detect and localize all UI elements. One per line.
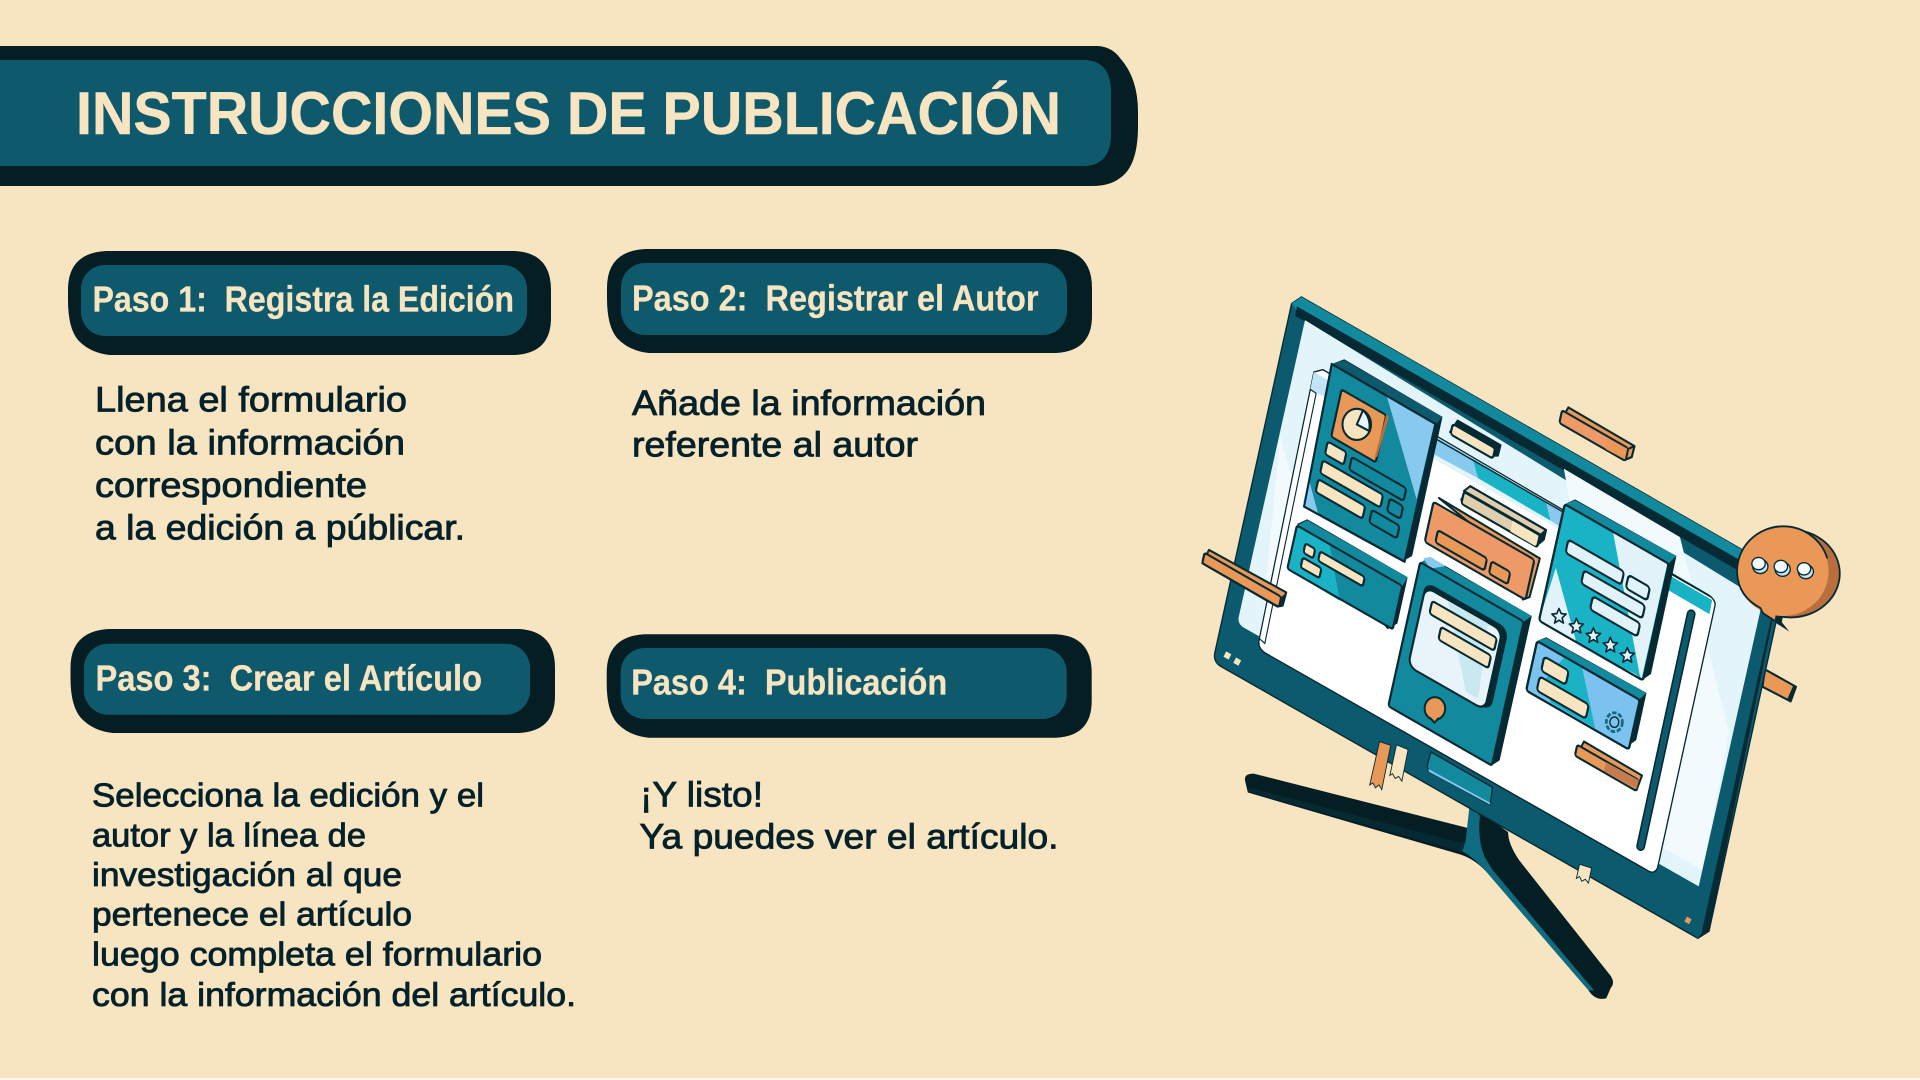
step 1 text: con la información xyxy=(95,423,405,462)
floating bar top xyxy=(1559,407,1634,461)
monitor frame xyxy=(1214,297,1786,938)
step 3 text: pertenece el artículo xyxy=(92,896,412,933)
step 3 text: Selecciona la edición y el xyxy=(92,777,484,814)
step 1 text xyxy=(95,381,465,548)
step 3 heading: Paso 3: Crear el Artículo xyxy=(96,658,482,699)
step 3 text: con la información del artículo. xyxy=(92,976,576,1013)
step 1 heading: Paso 1: Registra la Edición xyxy=(92,278,514,320)
illustration: monitor with interface cards xyxy=(1202,297,1840,999)
monitor screen xyxy=(1238,320,1763,886)
step 1 heading xyxy=(68,251,551,355)
step 4 heading xyxy=(607,634,1092,738)
step 1 text: a la edición a públicar. xyxy=(95,508,465,548)
cream input bar xyxy=(1461,486,1546,547)
step 2 text: Añade la información xyxy=(632,384,986,423)
step 2 text: referente al autor xyxy=(632,426,918,465)
floating bar behind monitor xyxy=(1763,669,1796,701)
floating bar left xyxy=(1202,550,1286,607)
small cream label xyxy=(1450,421,1501,459)
step 4 text: Ya puedes ver el artículo. xyxy=(640,817,1058,856)
card: text lines xyxy=(1287,519,1408,629)
step 1 text: correspondiente xyxy=(95,466,367,505)
title banner xyxy=(0,46,1138,186)
card: chart profile xyxy=(1303,359,1442,562)
rating stars xyxy=(1552,608,1634,662)
speech bubble xyxy=(1737,526,1840,632)
step 3 text: investigación al que xyxy=(92,856,402,893)
card: settings xyxy=(1526,637,1646,749)
step 3 heading xyxy=(70,629,555,733)
step 4 heading: Paso 4: Publicación xyxy=(631,662,947,703)
stand connector xyxy=(1427,752,1492,805)
step 2 text xyxy=(632,384,986,465)
card: tablet form xyxy=(1388,557,1532,766)
step 2 heading: Paso 2: Registrar el Autor xyxy=(632,278,1038,318)
step 3 text xyxy=(92,777,576,1013)
orange card xyxy=(1425,498,1540,600)
step 3 text: autor y la línea de xyxy=(92,817,366,854)
monitor stand xyxy=(1245,774,1613,999)
bubble dots xyxy=(1752,557,1813,579)
application window xyxy=(1259,370,1715,872)
step 2 heading xyxy=(607,249,1092,353)
step 4 text: ¡Y listo! xyxy=(640,776,763,815)
title banner: INSTRUCCIONES DE PUBLICACIÓN xyxy=(76,79,1061,147)
orange action bar xyxy=(1575,742,1642,791)
step 3 text: luego completa el formulario xyxy=(92,936,542,973)
icon: gear xyxy=(1606,713,1622,732)
card: rating form xyxy=(1539,499,1676,680)
step 4 text xyxy=(640,776,1058,856)
step 1 text: Llena el formulario xyxy=(95,381,407,420)
tape strips xyxy=(1370,742,1592,883)
